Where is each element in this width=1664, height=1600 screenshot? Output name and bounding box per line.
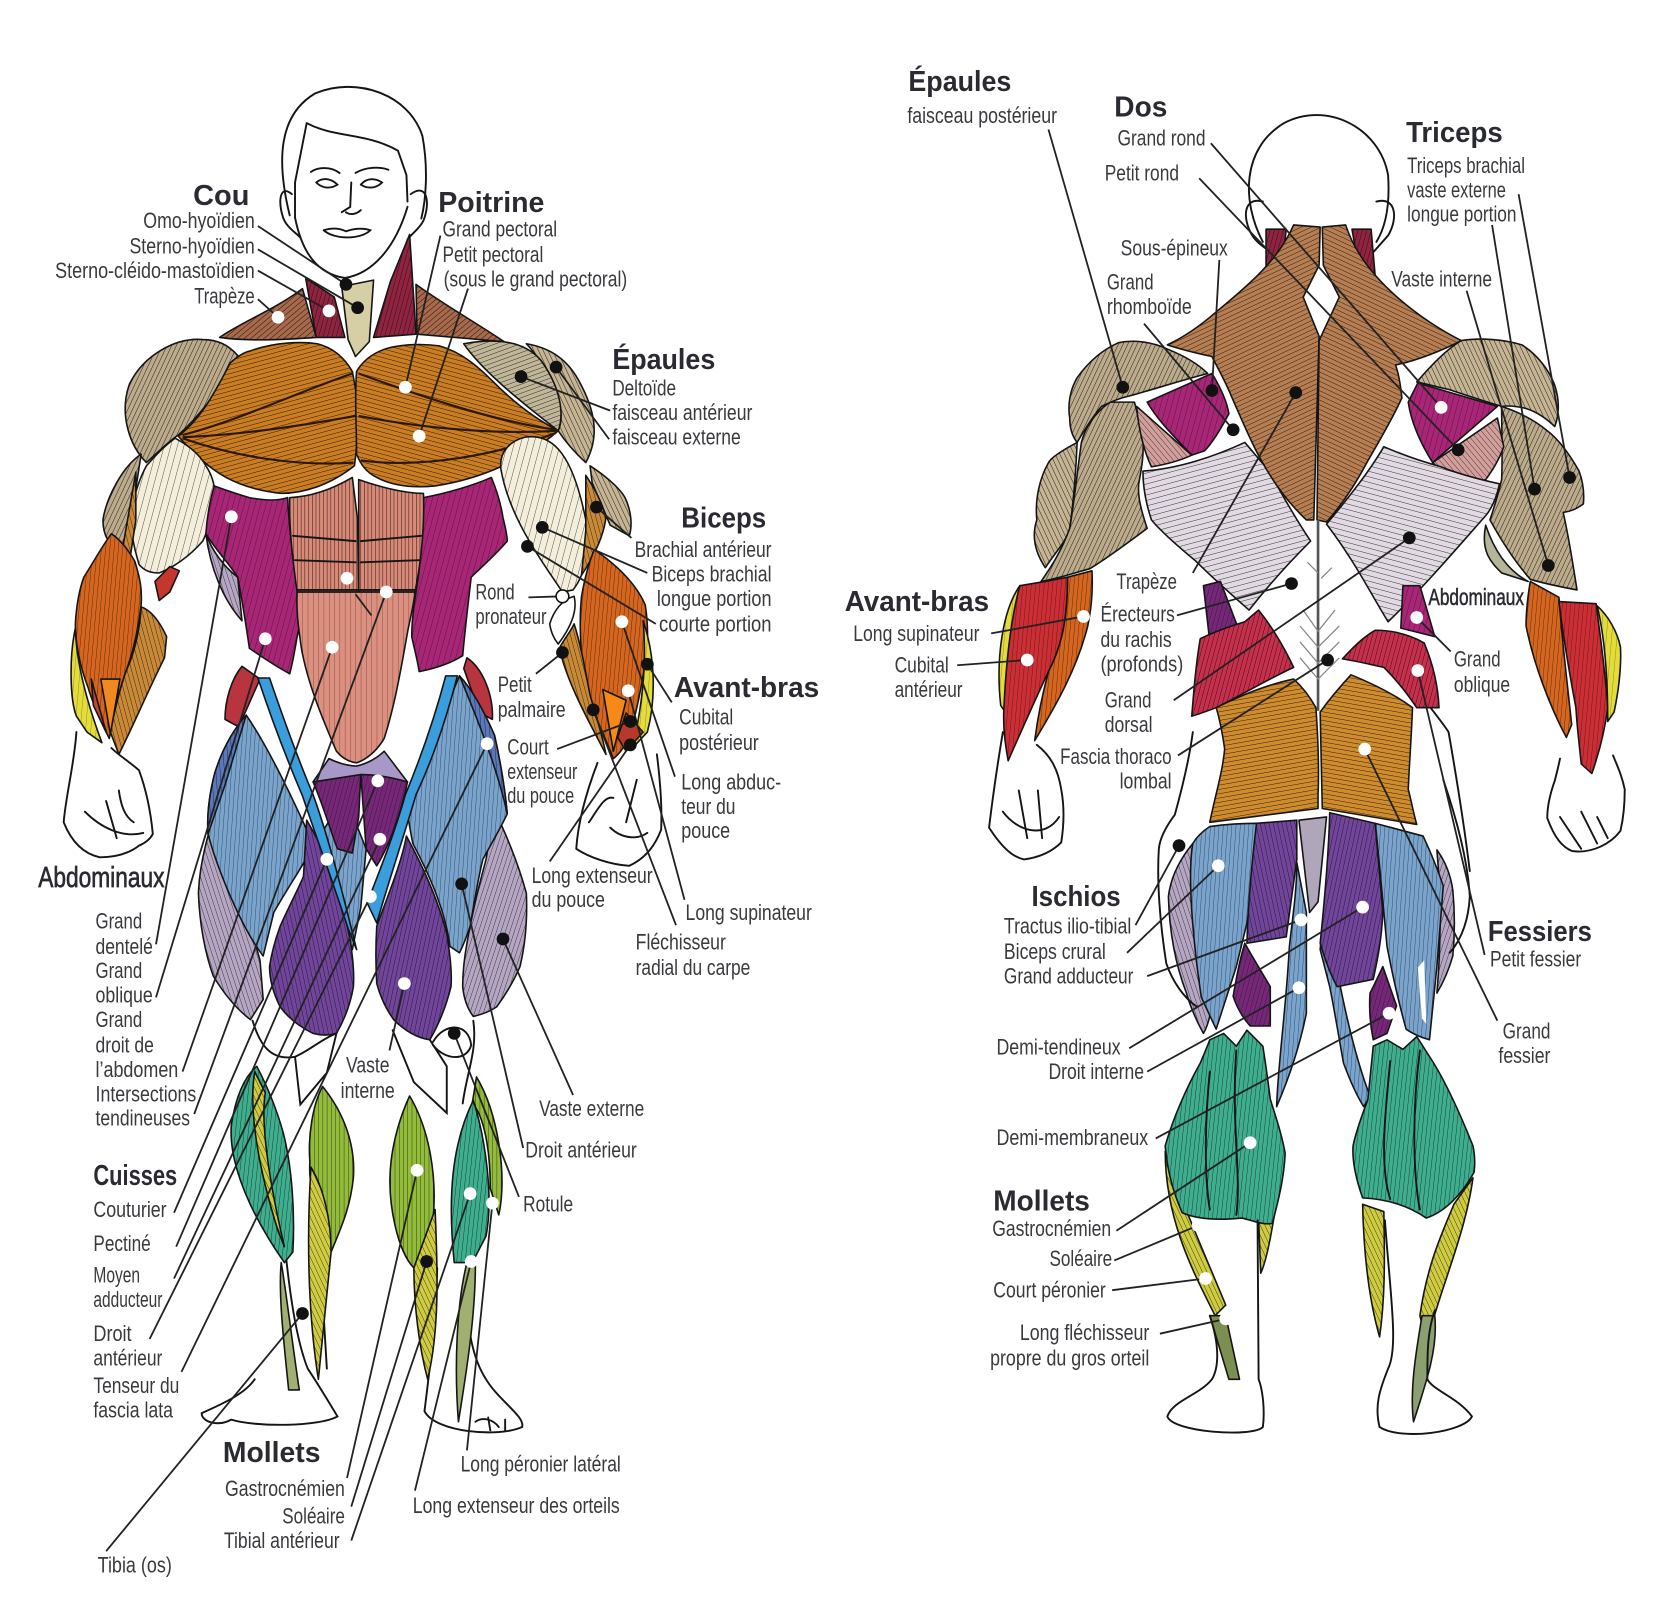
labels: Abdominaux back: Grand: [1454, 646, 1501, 671]
labels: Abdominaux front: [38, 862, 196, 1131]
labels: Fessiers: Fessiers: [1488, 916, 1592, 948]
labels: Mollets front: Long extenseur des orteils: [413, 1493, 620, 1518]
white dots front: [225, 305, 635, 1268]
leaders: calf: [1112, 1143, 1250, 1334]
labels: Dos: rhomboïde: [1107, 294, 1192, 319]
labels: Mollets back: propre du gros orteil: [990, 1346, 1149, 1371]
muscle: back abdominals: [1203, 581, 1435, 642]
labels: Cou: Omo-hyoïdien: [143, 208, 255, 233]
muscle: rotator cuff: [1137, 373, 1504, 482]
labels: Cuisses: [93, 1160, 179, 1423]
labels: Abdominaux front: tendineuses: [96, 1106, 190, 1131]
labels: Abdominaux front: dentelé: [96, 934, 153, 959]
labels: Dos: Grand rond: [1117, 125, 1206, 150]
labels: Triceps: longue portion: [1407, 202, 1516, 227]
muscle: serratus and obliques: [206, 477, 507, 674]
muscle: latissimus dorsi: [1143, 442, 1500, 622]
labels: Abdominaux front: oblique: [96, 983, 153, 1008]
labels: Avant-bras front: Fléchisseur: [636, 930, 726, 955]
labels: thumb extensors: du pouce: [532, 887, 605, 912]
labels: Dos: Érecteurs: [1100, 602, 1175, 627]
labels: Dos: Petit rond: [1105, 160, 1179, 185]
labels: Mollets front: Long péronier latéral: [461, 1452, 621, 1477]
labels: Dos: Trapèze: [1116, 569, 1177, 594]
labels: right thigh: interne: [341, 1078, 395, 1103]
leaders: lower leg: [106, 1170, 492, 1551]
labels: thumb extensors: Court: [507, 734, 549, 759]
labels: Mollets back: Long fléchisseur: [1020, 1320, 1150, 1345]
labels: Biceps: longue portion: [657, 586, 772, 611]
muscle: neck: [1266, 229, 1375, 278]
muscle: gluteus maximus: [1210, 675, 1417, 824]
labels: Ischios: Grand adducteur: [1004, 964, 1134, 989]
labels: Avant-bras back: Cubital: [895, 653, 949, 678]
labels: thumb extensors: Long extenseur: [532, 863, 653, 888]
labels: Épaules front: faisceau externe: [612, 425, 741, 450]
labels: Épaules back: [907, 64, 1057, 128]
labels: Épaules front: Deltoïde: [612, 376, 676, 401]
labels: Mollets front: Tibia (os): [98, 1552, 172, 1577]
labels: right thigh: Droit antérieur: [525, 1138, 637, 1163]
labels: thumb extensors: [507, 734, 653, 912]
muscle: back trapezius: [1167, 225, 1461, 522]
labels: Fessiers: fessier: [1498, 1043, 1551, 1068]
muscle: spine erector area: [1300, 520, 1339, 711]
muscle: right hamstrings: [1320, 813, 1454, 1107]
labels: Cuisses: fascia lata: [93, 1398, 173, 1423]
white dots back: [1021, 401, 1448, 1325]
labels: Triceps: vaste externe: [1407, 177, 1506, 202]
head and face: [280, 87, 427, 278]
labels: Avant-bras back: Avant-bras: [845, 586, 989, 618]
labels: Mollets back: Gastrocnémien: [992, 1216, 1111, 1241]
leaders: triceps: [1467, 194, 1570, 566]
muscle: upper arm outer: [103, 454, 631, 575]
labels: Triceps: [1391, 117, 1525, 291]
labels: Ischios: [996, 881, 1148, 1150]
labels: Abdominaux front: Grand: [96, 958, 142, 983]
labels: Cuisses: adducteur: [93, 1287, 163, 1312]
muscle: back forearm right: [1526, 581, 1621, 773]
labels: Mollets front: [98, 1437, 621, 1577]
leaders: neck: [258, 226, 358, 317]
hands: [64, 732, 661, 866]
muscle: back forearm left: [999, 571, 1092, 761]
labels: Biceps: [635, 502, 772, 636]
labels: Avant-bras front: Long supinateur: [686, 900, 812, 925]
knees and lower-leg outline: [202, 1021, 522, 1432]
labels: Ischios: Demi-membraneux: [996, 1125, 1148, 1150]
labels: Dos: Sous-épineux: [1121, 236, 1228, 261]
labels: Poitrine: (sous le grand pectoral): [444, 266, 627, 291]
labels: Fessiers: [1488, 916, 1592, 1068]
muscle: forearm left: [71, 534, 179, 754]
leaders: hamstrings: [1127, 846, 1389, 1138]
muscle: forearm right: [550, 550, 653, 759]
labels: Abdominaux front: Abdominaux: [38, 862, 165, 894]
muscle: right thigh: [361, 676, 527, 1040]
leaders: biceps: [527, 507, 656, 624]
muscle: biceps: [131, 437, 587, 592]
muscle: left hamstrings: [1168, 817, 1327, 1107]
labels: Avant-bras front: radial du carpe: [636, 955, 750, 980]
labels: Avant-bras front: Cubital: [679, 705, 733, 730]
labels: thumb extensors: extenseur: [507, 759, 578, 784]
labels: Fessiers: Grand: [1503, 1019, 1550, 1044]
labels: Poitrine: Grand pectoral: [443, 217, 557, 242]
labels: Mollets front: Tibial antérieur: [224, 1528, 340, 1553]
labels: Triceps: Triceps brachial: [1407, 153, 1525, 178]
leader lines front: [106, 226, 684, 1551]
labels: Cou: Trapèze: [194, 283, 255, 308]
muscle: right lower leg: [390, 1077, 502, 1422]
muscle: abdominals: [290, 477, 424, 763]
labels: Dos: Grand: [1107, 270, 1154, 295]
leaders: thigh: [150, 744, 573, 1372]
labels: Dos: Grand: [1105, 688, 1151, 713]
labels: Rond pronateur: Rond: [475, 579, 515, 604]
back figure: [989, 115, 1625, 1434]
labels: Cuisses: Cuisses: [93, 1160, 177, 1192]
labels: Fessiers: Petit fessier: [1490, 947, 1582, 972]
labels: Dos: du rachis: [1100, 627, 1172, 652]
labels: Poitrine: Petit pectoral: [443, 242, 543, 267]
labels: Dos: Fascia thoraco: [1060, 744, 1172, 769]
black dots back: [1116, 381, 1576, 852]
labels: Épaules back: Épaules: [908, 64, 1011, 98]
leaders: upper back: [1048, 129, 1458, 573]
labels: Mollets front: Soléaire: [282, 1504, 345, 1529]
leader lines back: [957, 129, 1570, 1334]
labels: Épaules front: Épaules: [612, 342, 715, 376]
labels: Dos: [1060, 92, 1228, 793]
labels: Poitrine: [438, 187, 627, 291]
anchor dots back: [1021, 381, 1576, 1325]
muscle: tensor fasciae latae: [225, 658, 492, 727]
muscle: left calf: [1165, 1030, 1285, 1379]
labels: Petit palmaire: Petit: [498, 672, 532, 697]
muscle: right calf: [1353, 1037, 1475, 1422]
labels: Avant-bras front: Long abduc-: [681, 769, 781, 794]
labels: Cuisses: Couturier: [93, 1197, 167, 1222]
head and ears: [1246, 115, 1394, 255]
muscle: neck sterno-cleido-mastoid: [306, 234, 416, 356]
labels: Cou: Sterno-cléido-mastoïdien: [55, 258, 255, 283]
labels: right thigh: Vaste: [346, 1053, 389, 1078]
labels: Ischios: Tractus ilio-tibial: [1004, 914, 1131, 939]
labels: Abdominaux front: Intersections: [96, 1081, 196, 1106]
labels: Abdominaux back: Abdominaux: [1428, 584, 1524, 610]
labels: Avant-bras front: postérieur: [679, 730, 759, 755]
labels: Avant-bras front: [636, 672, 819, 980]
leaders: abdomen: [156, 517, 386, 1114]
labels: Cuisses: antérieur: [93, 1346, 163, 1371]
labels: Cuisses: Moyen: [93, 1263, 140, 1288]
labels: Dos: lombal: [1120, 768, 1172, 793]
labels: Mollets back: Mollets: [993, 1186, 1090, 1218]
labels: Abdominaux front: l’abdomen: [96, 1057, 178, 1082]
labels: Cou: Cou: [193, 180, 249, 212]
thigh and leg outlines: [1158, 708, 1472, 1434]
labels: Mollets back: Court péronier: [993, 1278, 1106, 1303]
labels: Biceps: courte portion: [659, 611, 772, 636]
labels: Abdominaux front: droit de: [96, 1033, 154, 1058]
labels: Cuisses: Pectiné: [93, 1231, 151, 1256]
black dots front: [296, 278, 654, 1320]
labels: Avant-bras front: Avant-bras: [674, 672, 819, 704]
labels: Ischios: Demi-tendineux: [996, 1035, 1121, 1060]
labels: thumb extensors: du pouce: [507, 783, 574, 808]
labels: Dos: Dos: [1114, 92, 1167, 124]
muscle: left lower leg: [231, 1066, 354, 1390]
labels: Épaules front: faisceau antérieur: [612, 400, 753, 425]
front figure: [64, 87, 661, 1432]
leaders: shoulder: [521, 367, 610, 439]
muscle: deltoids: [125, 339, 594, 463]
labels: Petit palmaire: palmaire: [498, 697, 566, 722]
labels: Triceps: Triceps: [1406, 117, 1503, 149]
labels: Avant-bras front: pouce: [681, 818, 730, 843]
labels: Abdominaux back: [1428, 584, 1524, 697]
muscle: trapezius: [220, 284, 504, 342]
labels: Petit palmaire: [498, 672, 566, 722]
labels: Triceps: Vaste interne: [1391, 266, 1492, 291]
labels: Cuisses: Tenseur du: [93, 1373, 179, 1398]
labels: Rond pronateur: [475, 579, 547, 629]
labels: Mollets front: Gastrocnémien: [225, 1476, 345, 1501]
labels: Épaules back: faisceau postérieur: [907, 103, 1057, 128]
leaders: chest: [405, 236, 468, 436]
labels: Ischios: Droit interne: [1048, 1059, 1144, 1084]
labels: right thigh: Rotule: [523, 1192, 573, 1217]
labels: right thigh: Vaste externe: [539, 1096, 644, 1121]
labels: Poitrine: Poitrine: [438, 187, 544, 219]
labels: Rond pronateur: pronateur: [475, 604, 547, 629]
labels: Cou: [55, 180, 255, 308]
hands back: [989, 732, 1625, 859]
labels: Avant-bras back: Long supinateur: [853, 621, 980, 646]
muscle: gluteus medius: [1192, 610, 1439, 716]
labels: Épaules front: [612, 342, 753, 450]
labels: Cou: Sterno-hyoïdien: [129, 234, 255, 259]
muscle: back triceps: [1034, 402, 1584, 590]
labels: Biceps: Biceps: [681, 502, 766, 534]
labels: Dos: (profonds): [1100, 652, 1183, 677]
labels: Abdominaux back: oblique: [1454, 672, 1510, 697]
labels: Abdominaux front: Grand: [96, 908, 142, 933]
labels: right thigh: [341, 1053, 644, 1217]
labels: Avant-bras back: antérieur: [895, 677, 963, 702]
labels: Mollets front: Mollets: [223, 1437, 320, 1469]
anchor dots front: [225, 278, 654, 1320]
labels: Ischios: Biceps crural: [1004, 939, 1106, 964]
leaders: forearm: [528, 596, 684, 925]
muscle: back deltoids: [1069, 339, 1558, 442]
labels: Biceps: Biceps brachial: [652, 561, 772, 586]
labels: Ischios: Ischios: [1032, 881, 1121, 913]
leaders: mid back and forearm: [957, 538, 1497, 1021]
labels: Cuisses: Droit: [93, 1321, 132, 1346]
labels: Dos: dorsal: [1105, 712, 1152, 737]
labels: Avant-bras front: teur du: [681, 794, 735, 819]
labels: Mollets back: [990, 1186, 1150, 1371]
muscle: pectorals: [178, 343, 558, 493]
labels: Avant-bras back: [845, 586, 989, 702]
labels: Biceps: Brachial antérieur: [635, 537, 772, 562]
labels: Mollets back: Soléaire: [1050, 1246, 1112, 1271]
labels: Abdominaux front: Grand: [96, 1007, 142, 1032]
muscle: left thigh: [198, 678, 408, 1035]
